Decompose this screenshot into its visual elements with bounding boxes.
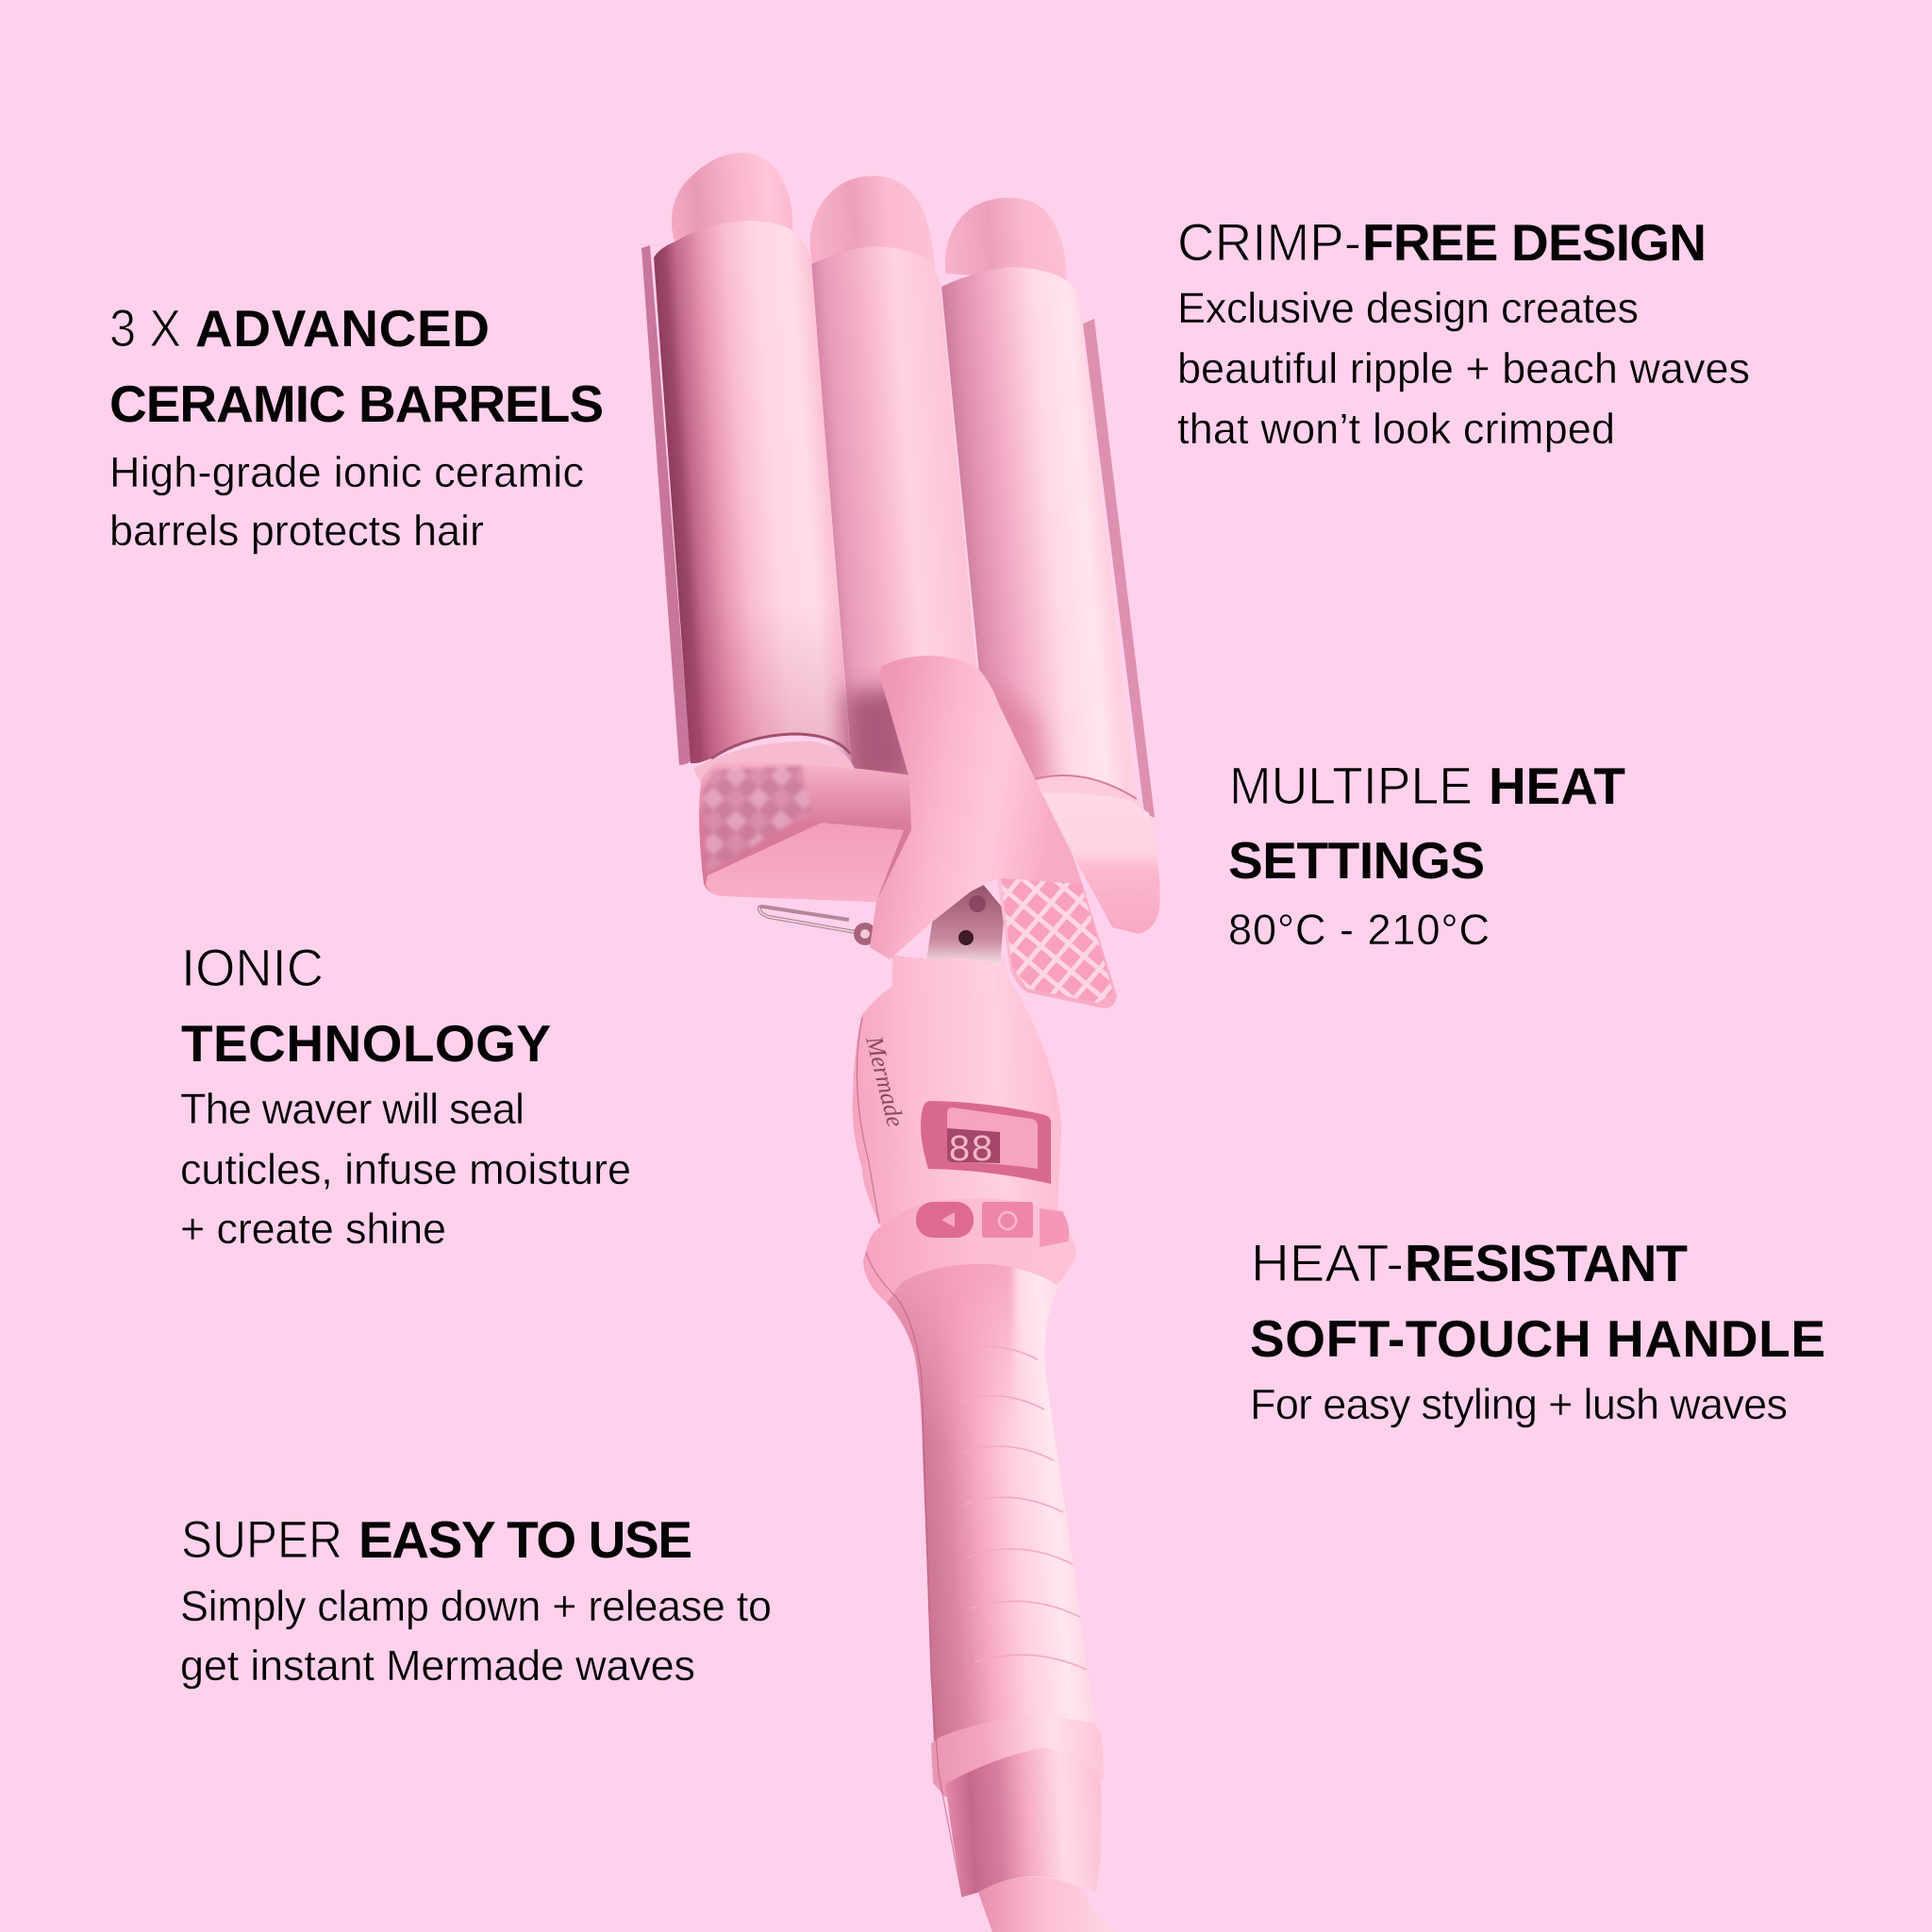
LCD display (921, 1101, 1051, 1184)
seam line (857, 1017, 962, 1897)
lower barrel shading (681, 604, 1049, 788)
heading: CERAMIC BARRELS (109, 375, 604, 433)
grip end band (931, 1717, 1104, 1797)
collar (863, 1198, 1075, 1303)
heading: HEAT- (1251, 1233, 1404, 1292)
product: triple barrel waver (641, 153, 1160, 1932)
stand wire and rivet (759, 907, 876, 945)
heading: ADVANCED (195, 299, 490, 358)
feature: multiple heat settings (1228, 756, 1625, 954)
heading: FREE DESIGN (1362, 213, 1707, 272)
control buttons (916, 1202, 1069, 1247)
description: The waver will seal (180, 1085, 525, 1133)
grip ridges (958, 1346, 1087, 1670)
heading: TECHNOLOGY (181, 1014, 551, 1073)
description: beautiful ripple + beach waves (1177, 344, 1750, 392)
heading (109, 298, 604, 433)
feature: super easy to use (180, 1509, 772, 1690)
heading: SUPER (181, 1509, 342, 1569)
description: Simply clamp down + release to (180, 1582, 772, 1630)
feature: 3 x advanced ceramic barrels (109, 298, 604, 555)
left base block (699, 762, 911, 902)
feature: heat-resistant soft-touch handle (1250, 1233, 1825, 1428)
description: For easy styling + lush waves (1250, 1380, 1788, 1428)
heading (1250, 1233, 1825, 1368)
handle head (853, 951, 1061, 1226)
heading: CRIMP- (1177, 212, 1361, 272)
metal hinge (926, 882, 1005, 964)
lever grip pad (1001, 878, 1113, 1003)
heading: EASY TO USE (358, 1510, 692, 1569)
heading: SOFT-TOUCH HANDLE (1250, 1309, 1825, 1368)
description: cuticles, infuse moisture (180, 1145, 631, 1193)
middle barrel (811, 246, 988, 788)
left block lower wedge (706, 823, 904, 902)
feature: ionic technology (180, 938, 631, 1253)
heading (181, 938, 551, 1073)
heading (181, 1509, 692, 1569)
heading: HEAT (1489, 757, 1625, 815)
description: barrels protects hair (109, 507, 484, 555)
grip top blend (887, 1264, 1018, 1407)
description (1177, 284, 1750, 453)
right barrel (941, 267, 1137, 799)
barrel bases (693, 734, 1149, 817)
left barrel (654, 221, 850, 763)
left clamp plate (641, 245, 691, 765)
heading: SETTINGS (1228, 831, 1485, 890)
description: that won’t look crimped (1177, 405, 1615, 453)
feature: crimp-free design (1177, 212, 1750, 453)
clamp lever (870, 656, 1117, 1008)
barrel caps (672, 153, 1066, 281)
brand logo: Mermade (860, 1032, 909, 1130)
heading: IONIC (181, 938, 324, 997)
right base block (1038, 792, 1160, 934)
right clamp plate (1083, 319, 1155, 818)
heading (1177, 212, 1707, 272)
description: get instant Mermade waves (180, 1641, 695, 1690)
description (180, 1085, 631, 1253)
description (180, 1582, 772, 1690)
heading (1228, 756, 1625, 890)
description: Exclusive design creates (1177, 284, 1639, 332)
power cord (978, 1877, 1117, 1932)
heading: 3 X (109, 298, 181, 358)
temperature range: 80°C - 210°C (1228, 906, 1490, 954)
LCD display: 88 (948, 1130, 993, 1173)
description: + create shine (180, 1205, 446, 1253)
heading: MULTIPLE (1229, 756, 1473, 815)
left block diamond texture (703, 766, 811, 873)
heading: RESISTANT (1405, 1234, 1688, 1292)
grip end sleeve (945, 1748, 1101, 1897)
description: High-grade ionic ceramic (109, 448, 584, 496)
lower grip (863, 1257, 1102, 1745)
description (109, 448, 584, 555)
